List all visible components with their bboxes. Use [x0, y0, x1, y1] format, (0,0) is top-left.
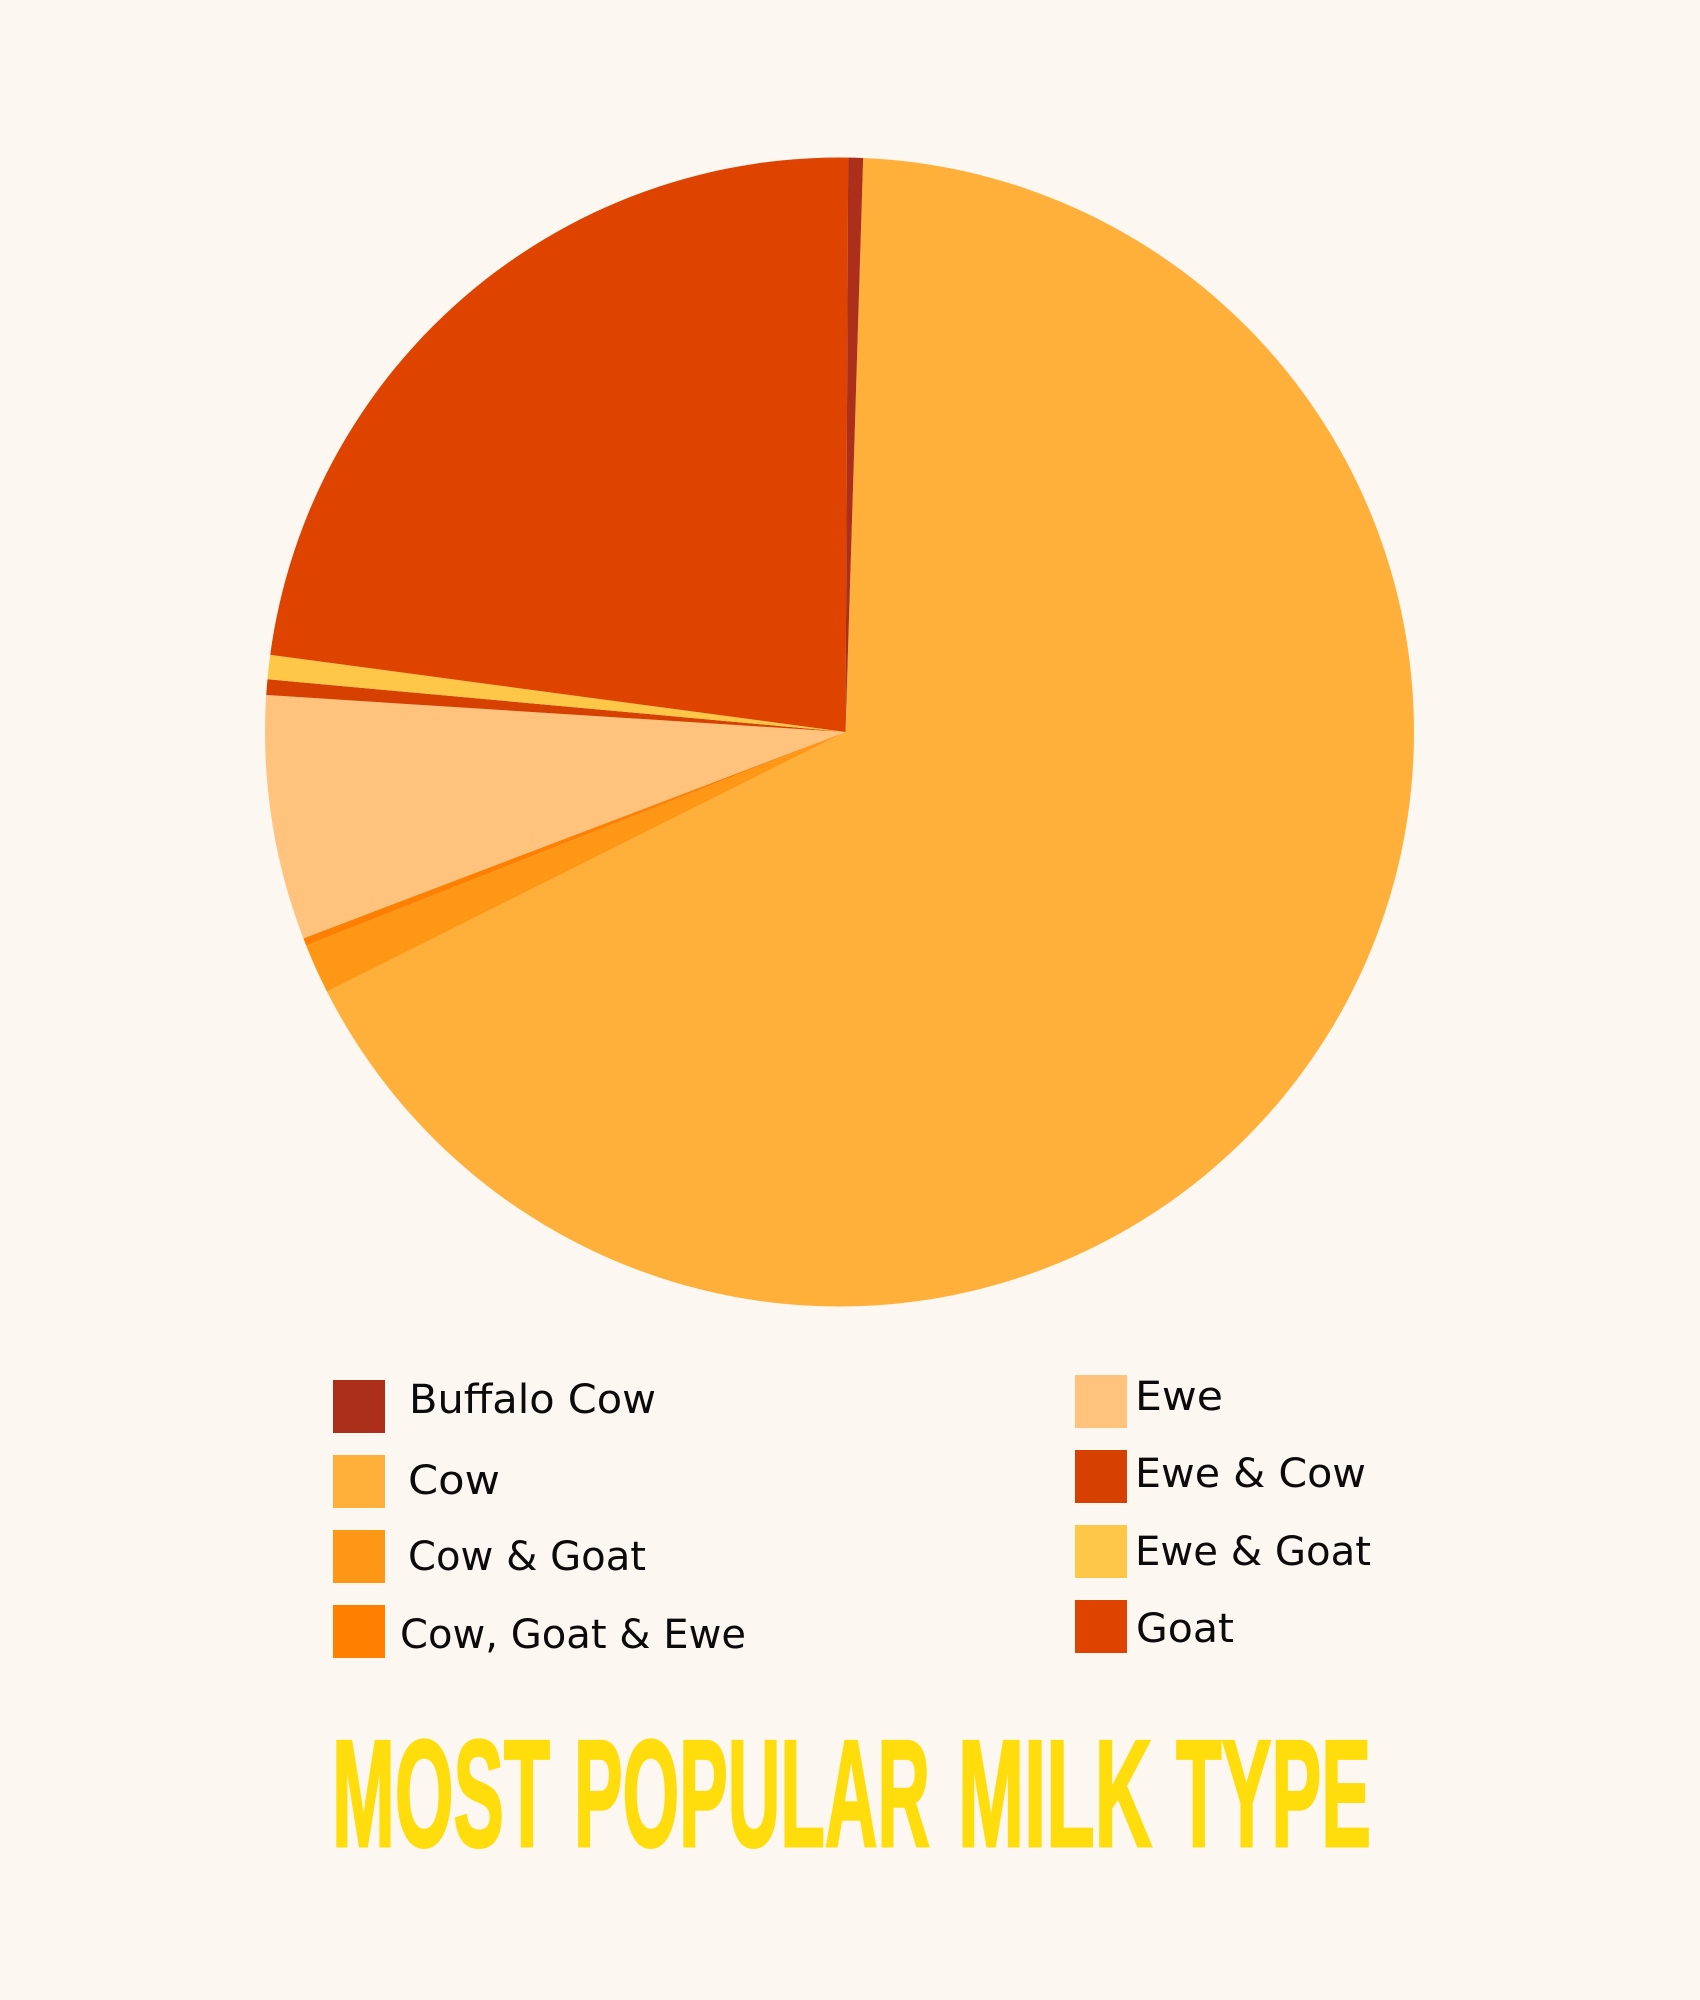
title: MOST — [332, 1709, 550, 1879]
legend item: cow and goat — [333, 1530, 646, 1583]
legend item: ewe and goat — [1075, 1525, 1371, 1578]
slice: ewe and cow — [266, 679, 844, 732]
slice: cow, goat and ewe — [303, 734, 842, 946]
slice: goat — [270, 158, 848, 732]
legend item: buffalo cow: Buffalo Cow — [409, 1377, 656, 1423]
slice: buffalo cow — [846, 158, 864, 732]
text: TYPE — [1176, 1709, 1371, 1879]
legend item: cow, goat and ewe: Cow, Goat & Ewe — [400, 1612, 746, 1658]
legend item: goat: Goat — [1136, 1606, 1234, 1652]
legend item: goat — [1075, 1600, 1234, 1653]
slice: ewe — [265, 695, 845, 938]
legend item: ewe and goat: Ewe & Goat — [1135, 1529, 1371, 1575]
legend item: cow — [333, 1455, 500, 1508]
legend item: buffalo cow — [333, 1377, 656, 1433]
legend item: ewe — [1075, 1374, 1223, 1428]
legend item: ewe and cow — [1075, 1450, 1366, 1503]
pie chart: most popular milk type — [265, 158, 1414, 1306]
legend item: ewe and cow: Ewe & Cow — [1135, 1451, 1366, 1497]
title: MILK — [958, 1709, 1152, 1879]
legend: right column — [1075, 1374, 1371, 1653]
slice: ewe and goat — [268, 654, 844, 732]
slice: cow and goat — [306, 732, 845, 992]
legend: left column — [333, 1377, 746, 1658]
title: POPULAR — [574, 1709, 930, 1879]
legend item: cow: Cow — [408, 1458, 500, 1504]
legend item: cow and goat: Cow & Goat — [408, 1534, 646, 1580]
legend item: ewe: Ewe — [1135, 1374, 1223, 1420]
slice: cow — [327, 158, 1414, 1306]
